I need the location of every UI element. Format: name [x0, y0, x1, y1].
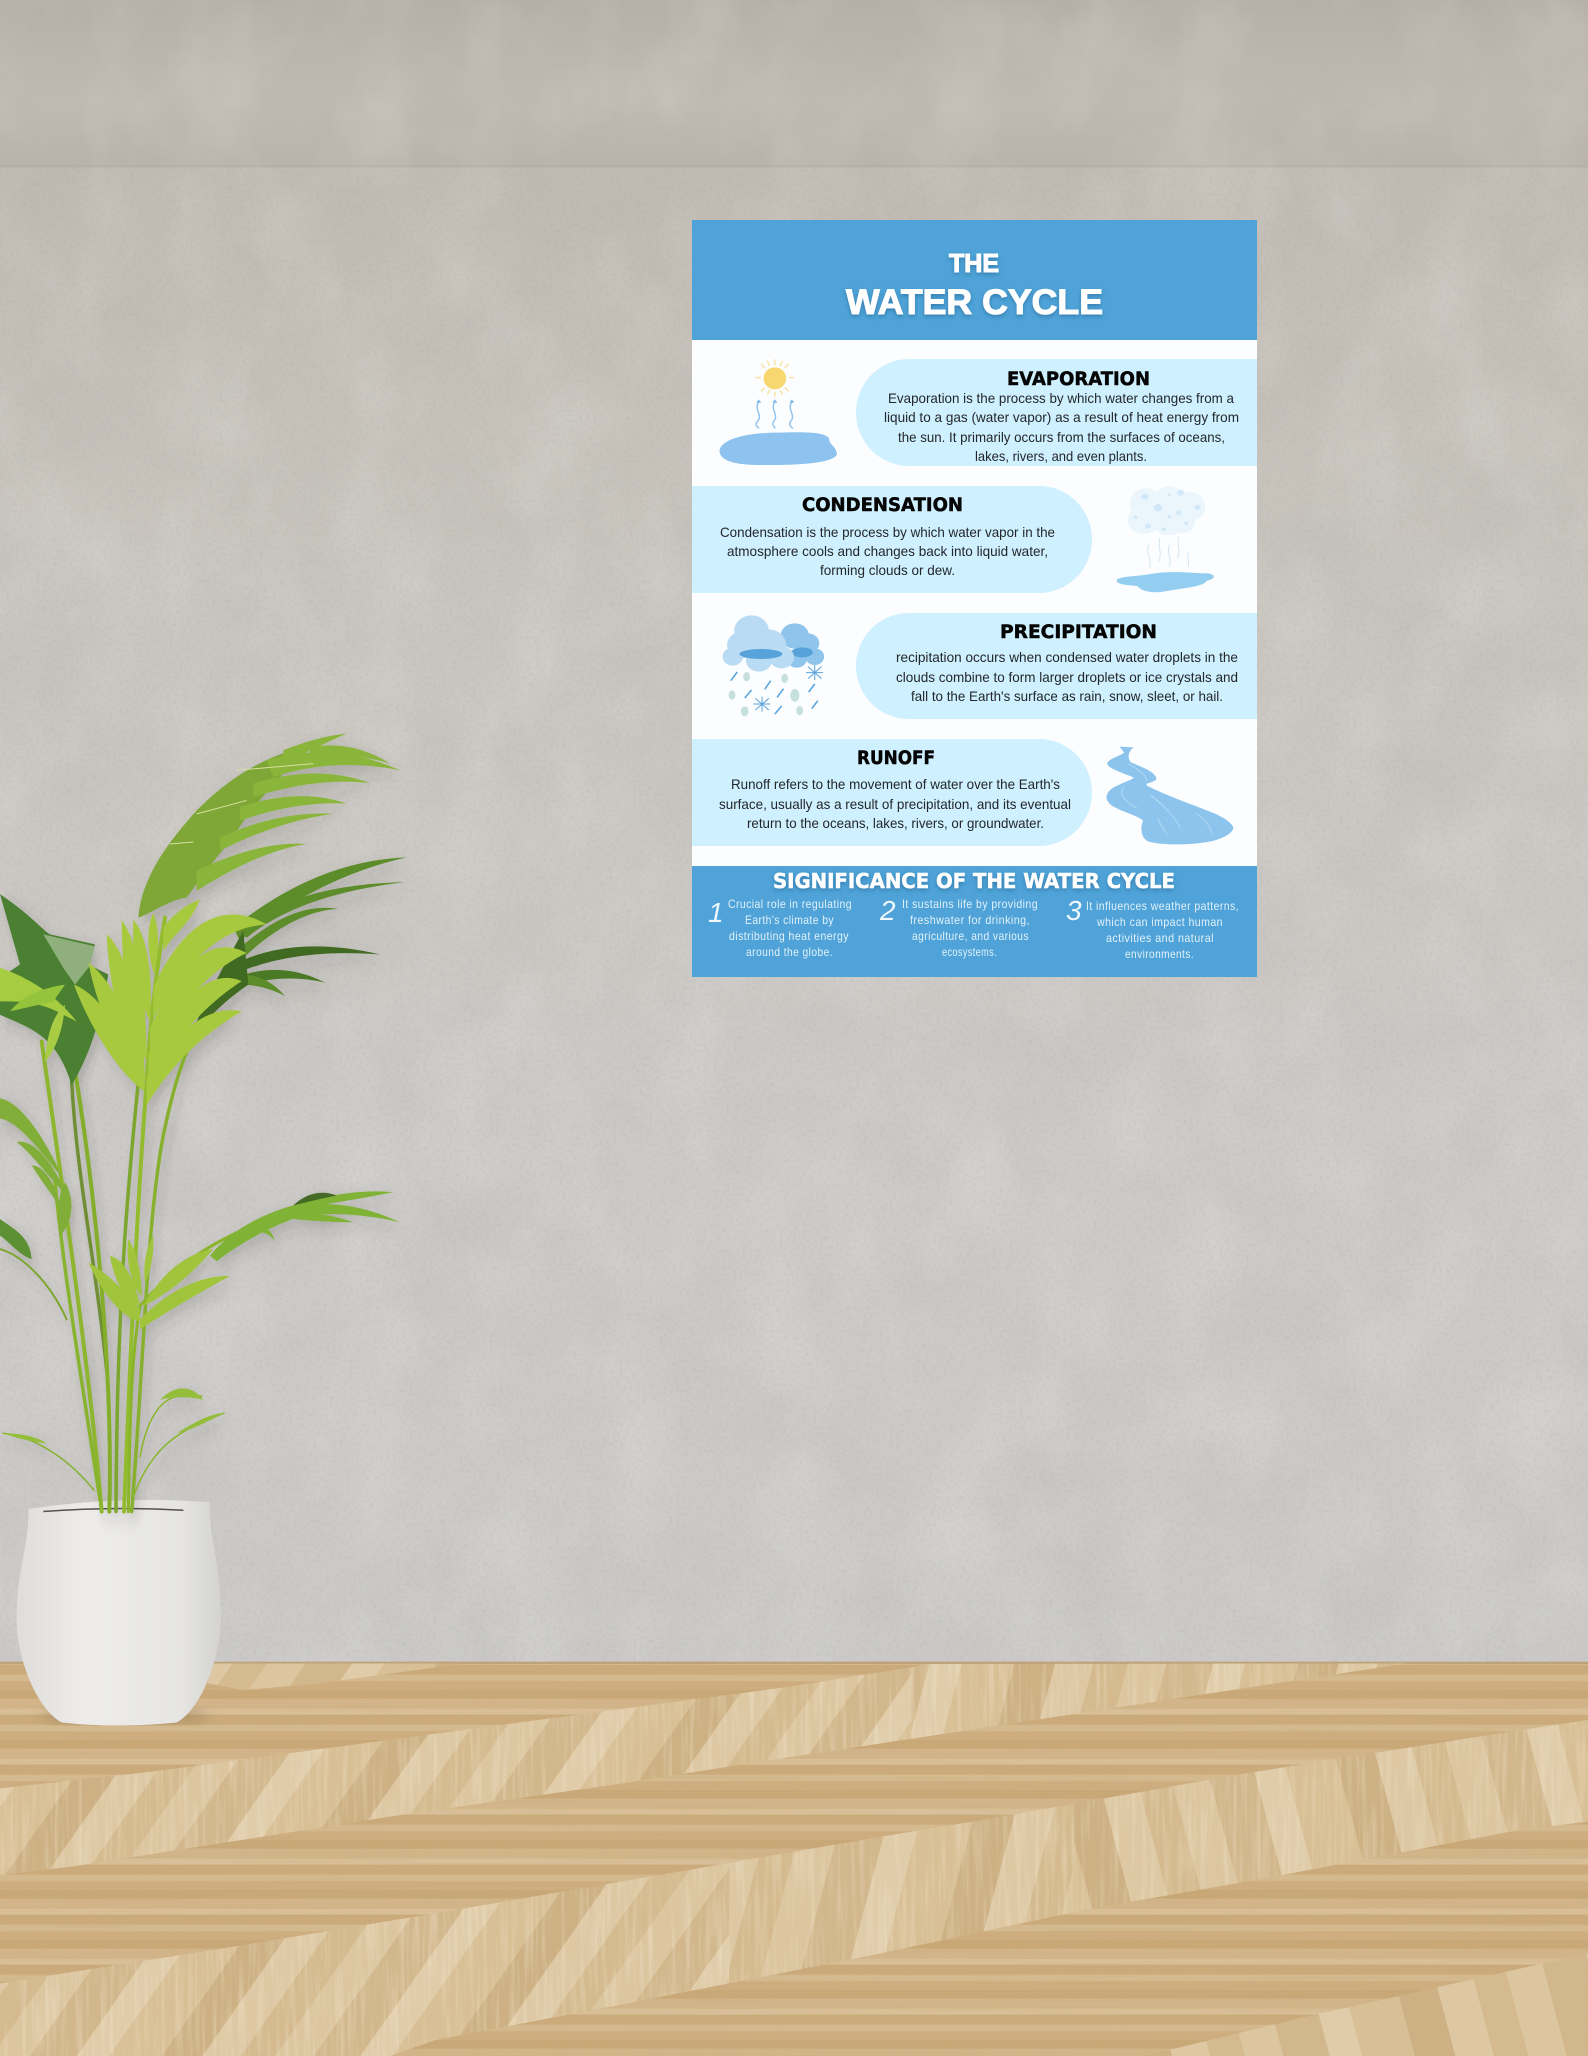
- text: runoff: [719, 776, 1071, 831]
- point 3: activities and natural: [1106, 931, 1214, 945]
- text: precipitation: recipitation occurs when condensed water droplets in the: [896, 649, 1238, 665]
- point 2: agriculture, and various: [912, 929, 1029, 943]
- point 2: It sustains life by providing: [902, 897, 1038, 911]
- panel: significance of the water cycle: [692, 866, 1257, 977]
- point 1: Crucial role in regulating: [728, 897, 852, 911]
- point 3: environments.: [1125, 947, 1194, 961]
- panel: condensation: [692, 486, 1092, 593]
- panel: precipitation: [856, 613, 1257, 719]
- heading: runoff: RUNOFF: [857, 748, 935, 769]
- point 3: which can impact human: [1096, 915, 1223, 929]
- panel: evaporation: [856, 359, 1257, 466]
- panel: runoff: [692, 739, 1092, 846]
- point 2: freshwater for drinking,: [910, 913, 1030, 927]
- point 1: 1: [708, 897, 724, 928]
- point 1: Earth's climate by: [745, 913, 834, 927]
- header band: [692, 220, 1257, 340]
- point 1: around the globe.: [746, 945, 833, 959]
- point 2: ecosystems.: [942, 945, 997, 959]
- text: evaporation: lakes, rivers, and even plants.: [975, 448, 1147, 464]
- central lime frond: [74, 900, 267, 1105]
- point 3: It influences weather patterns,: [1086, 899, 1239, 913]
- point 3: 3: [1066, 895, 1082, 926]
- text: runoff: Runoff refers to the movement of water over the Earth's: [731, 776, 1060, 792]
- small base leaves: [3, 1388, 225, 1443]
- icon: sun and evaporating puddle: [720, 359, 837, 465]
- icon: condensing cloud and puddle: [1117, 487, 1214, 592]
- heading: precipitation: PRECIPITATION: [1000, 622, 1157, 643]
- heading: condensation: CONDENSATION: [802, 495, 963, 516]
- text: condensation: [720, 524, 1055, 578]
- left lower frond: [0, 1098, 71, 1259]
- plant: palm with fronds and stems: [0, 733, 407, 1512]
- stems: [0, 918, 293, 1512]
- poster: [692, 220, 1257, 977]
- text: evaporation: Evaporation is the process by which water changes from a: [888, 390, 1234, 406]
- text: precipitation: clouds combine to form larger droplets or ice crystals and: [896, 669, 1238, 685]
- heading: significance: SIGNIFICANCE OF THE WATER CYCLE: [773, 869, 1175, 893]
- text: runoff: return to the oceans, lakes, rivers, or groundwater.: [747, 815, 1044, 831]
- text: evaporation: the sun. It primarily occurs from the surfaces of oceans,: [898, 429, 1225, 445]
- title: THE: [949, 248, 999, 278]
- icon: river: [1106, 747, 1233, 844]
- point 1: distributing heat energy: [729, 929, 849, 943]
- title: [846, 248, 1103, 322]
- point 1: [708, 897, 852, 959]
- text: evaporation: liquid to a gas (water vapor) as a result of heat energy from: [884, 409, 1239, 425]
- text: evaporation: [884, 390, 1239, 464]
- text: precipitation: [896, 649, 1238, 704]
- lower right frond: [88, 1236, 230, 1329]
- title: WATER CYCLE: [846, 283, 1103, 322]
- icon: rain and snow clouds: [723, 615, 824, 716]
- background: herringbone wood floor: [0, 1640, 1588, 2056]
- heading: evaporation: EVAPORATION: [1007, 369, 1150, 390]
- pot shadow on floor: [40, 1708, 210, 1724]
- text: runoff: surface, usually as a result of precipitation, and its eventual: [719, 796, 1071, 812]
- upper frond: [138, 733, 400, 918]
- point 2: 2: [879, 895, 896, 926]
- plant pot: [17, 1500, 221, 1725]
- text: condensation: atmosphere cools and changes back into liquid water,: [727, 543, 1048, 559]
- poster background: [692, 220, 1257, 977]
- point 3: [1066, 895, 1239, 961]
- point 2: [879, 895, 1038, 959]
- text: precipitation: fall to the Earth's surface as rain, snow, sleet, or hail.: [911, 688, 1223, 704]
- dark back frond: [187, 857, 407, 1045]
- left dark frond: [0, 894, 108, 1085]
- text: condensation: forming clouds or dew.: [820, 562, 955, 578]
- text: condensation: Condensation is the process by which water vapor in the: [720, 524, 1055, 540]
